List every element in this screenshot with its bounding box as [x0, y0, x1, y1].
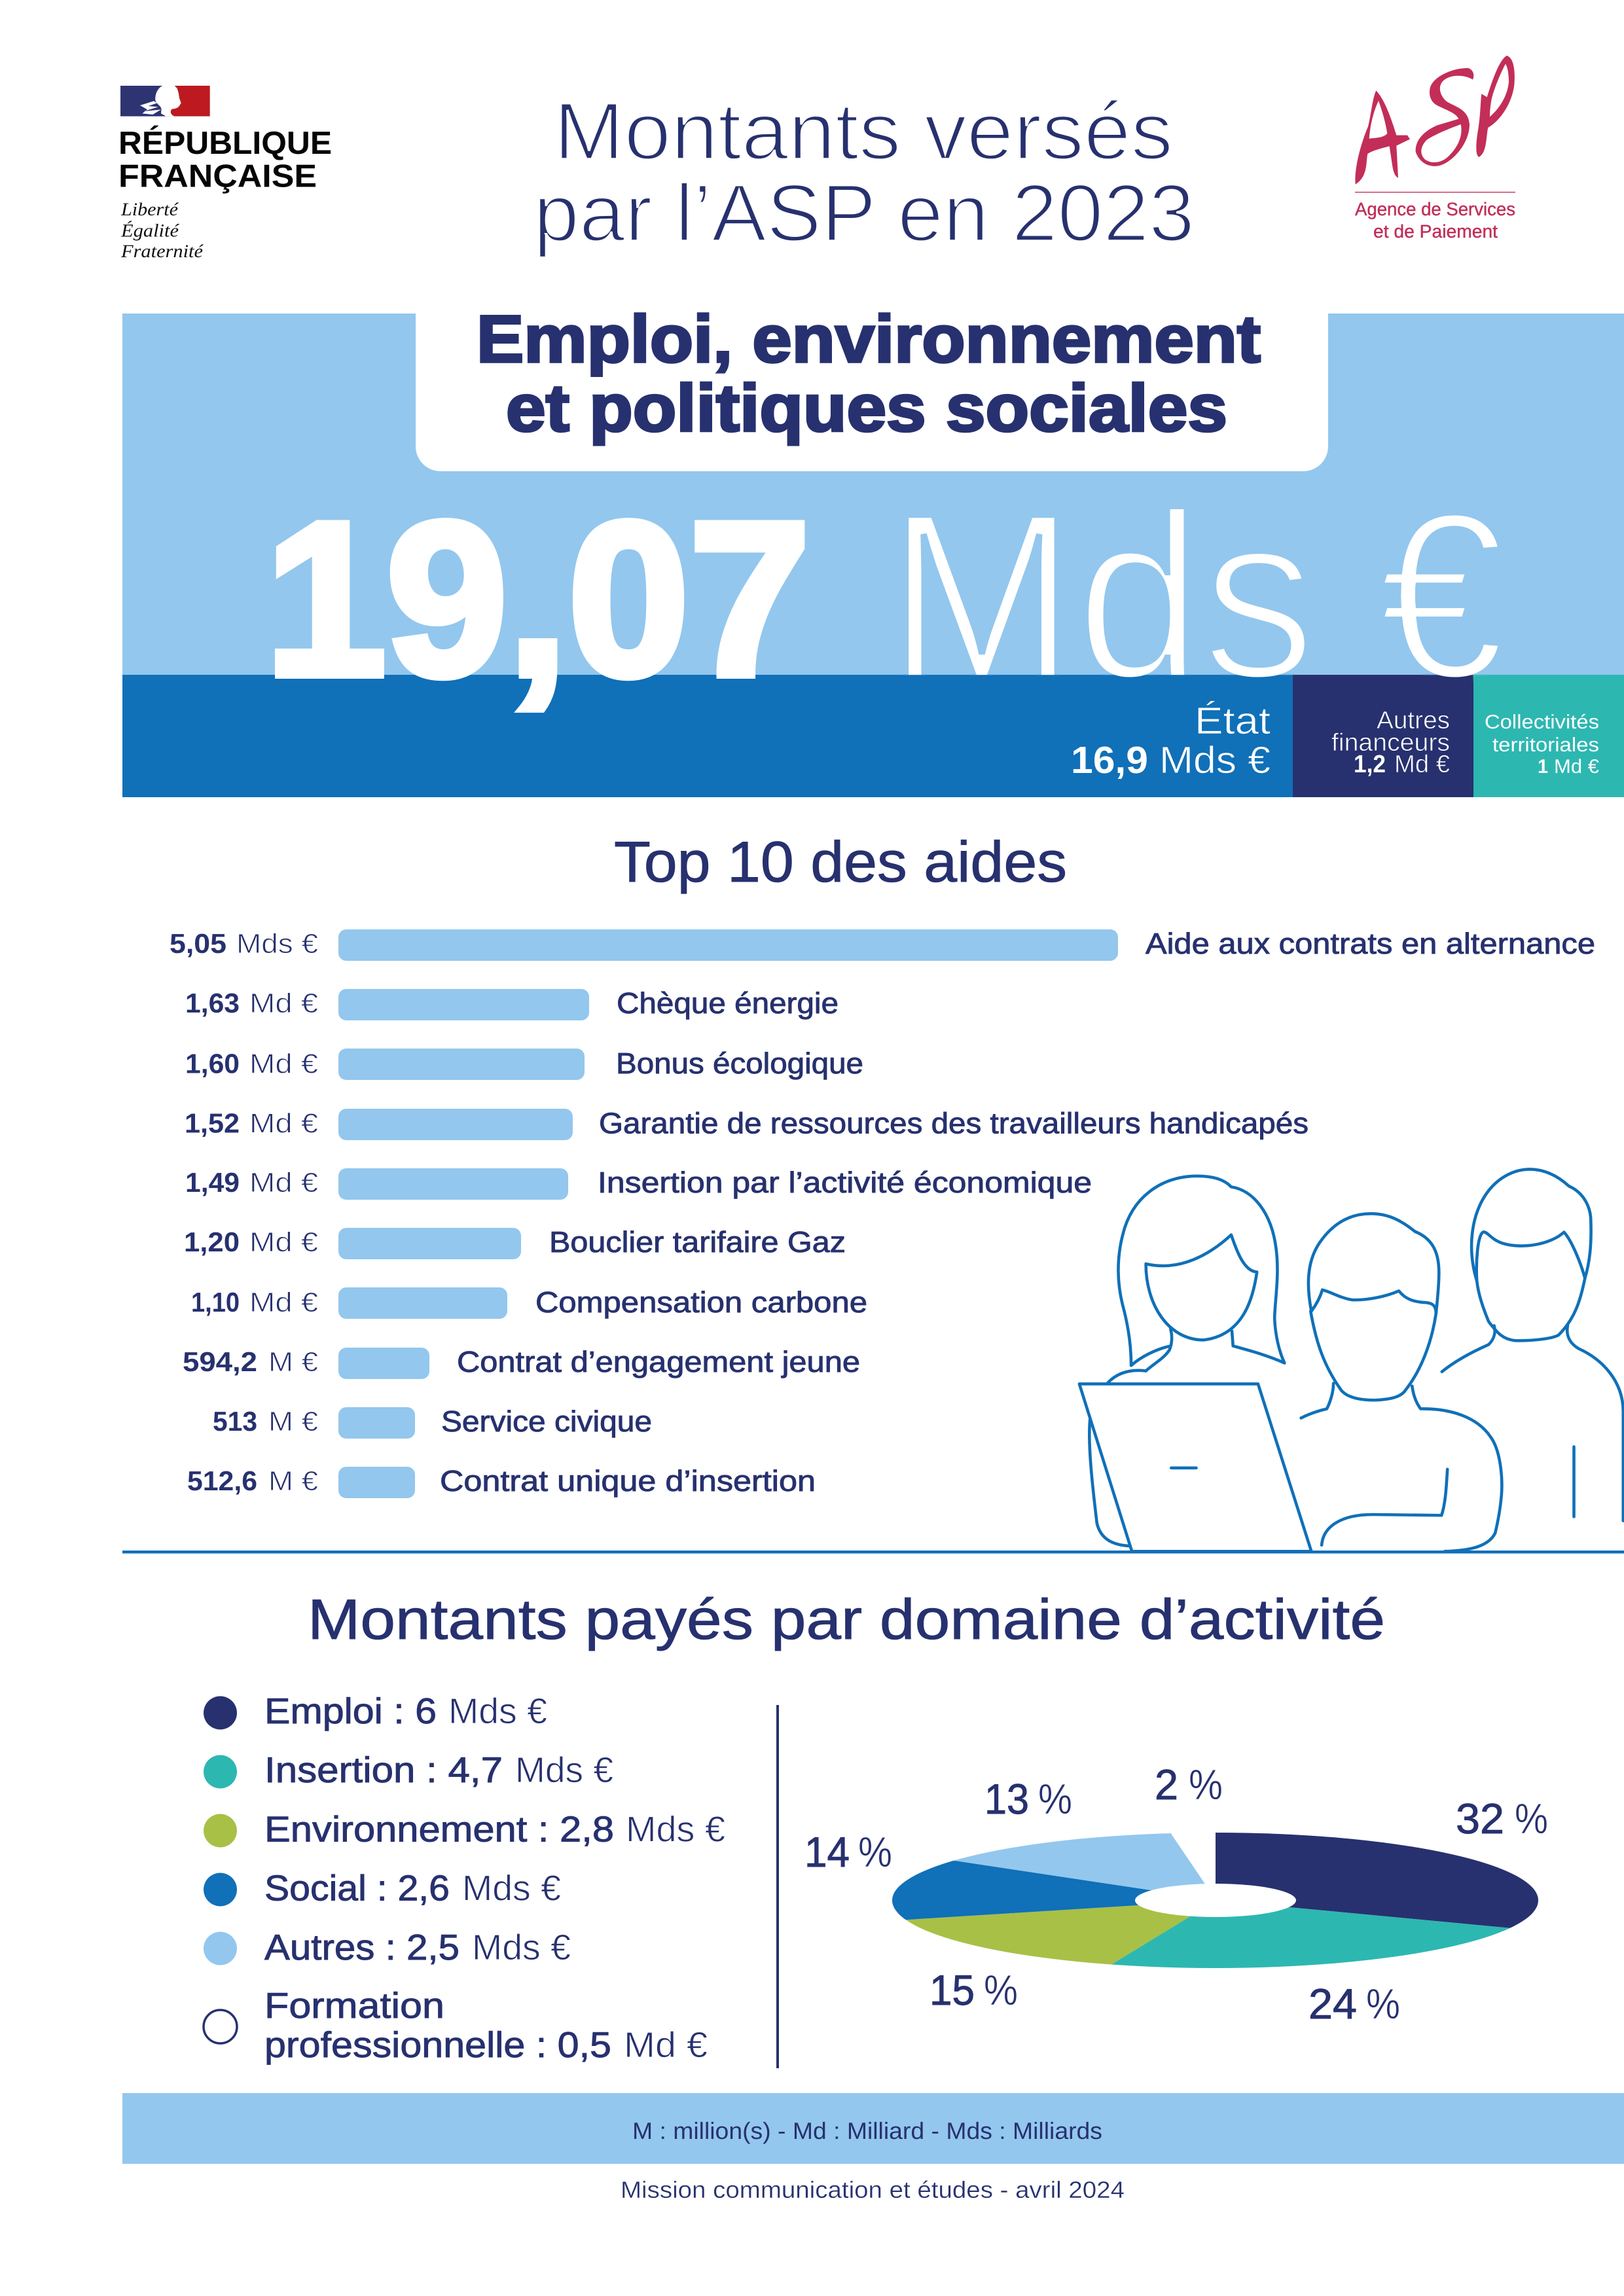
label: 24 % — [1308, 1980, 1400, 2028]
big number: 19,07 Mds €: 19,07 — [265, 476, 810, 721]
big number: 19,07 Mds € — [265, 463, 1505, 728]
panel background — [122, 314, 1624, 675]
label: 14 %: 14 — [804, 1828, 850, 1876]
row: Aide aux contrats en alternance: 5,05 — [170, 928, 226, 959]
label: 2 % — [1155, 1761, 1223, 1808]
row: Service civique: Service civique — [441, 1405, 652, 1438]
label: Collectivités territoriales 1 Md €: 1 — [1538, 756, 1548, 778]
row: Contrat unique d'insertion: M € — [268, 1465, 318, 1496]
heading tab — [416, 314, 1328, 471]
heading: Emploi, environnement et politiques sociales — [477, 302, 1261, 445]
label: Collectivités territoriales 1 Md €: Collectivités — [1485, 711, 1599, 733]
label: 14 % — [804, 1828, 892, 1876]
row: Insertion par l'activité économique: Md € — [249, 1167, 318, 1198]
credit line: Mission communication et études - avril 2024 — [621, 2176, 1125, 2203]
row: Contrat unique d'insertion: 512,6 — [187, 1465, 257, 1496]
legend item: Emploi — [204, 1691, 547, 1731]
man in the centre — [1301, 1213, 1502, 1551]
legend item: Formation professionnelle: Md € — [624, 2024, 708, 2065]
legend item: Social: Mds € — [462, 1868, 561, 1909]
slice: Emploi 32 % — [1216, 1833, 1538, 1928]
woman — [1089, 1176, 1284, 1546]
heading: Top 10 des aides: Top 10 des aides — [614, 829, 1067, 894]
laptop — [1079, 1384, 1311, 1551]
label: Collectivités territoriales 1 Md € — [1485, 711, 1599, 778]
logo caption — [1355, 199, 1515, 242]
label: Autres financeurs 1,2 Md €: Md € — [1394, 751, 1450, 778]
row: Contrat d'engagement jeune: 594,2 — [183, 1346, 257, 1377]
pie hole — [1135, 1884, 1296, 1917]
row: Aide aux contrats en alternance: Aide aux contrats en alternance — [1146, 927, 1595, 960]
label: 13 % — [984, 1775, 1072, 1823]
row: Bouclier tarifaire Gaz: 1,20 — [184, 1227, 240, 1257]
legend item: Environnement: Mds € — [626, 1809, 725, 1850]
legend item: Emploi: Mds € — [448, 1691, 547, 1731]
logo wordmark: FRANÇAISE — [118, 159, 317, 194]
slice: Autres 13 % — [877, 1820, 1216, 1901]
pie slices — [892, 1833, 1538, 1968]
pie chart: domaines d'activité — [807, 1769, 1547, 2018]
row: Compensation carbone: Md € — [249, 1287, 318, 1318]
row: Compensation carbone — [191, 1285, 867, 1319]
row: Service civique: M € — [268, 1406, 318, 1437]
label: 2 %: 2 — [1155, 1761, 1178, 1808]
label: 14 %: % — [858, 1828, 892, 1876]
row: Bouclier tarifaire Gaz: Md € — [249, 1227, 318, 1257]
row: Bonus écologique — [185, 1047, 863, 1080]
row: Garantie de ressources: Md € — [249, 1107, 318, 1139]
man on the right — [1442, 1169, 1623, 1521]
illustration: three people and a laptop — [1079, 1169, 1623, 1551]
row: Insertion par l'activité économique — [185, 1166, 1092, 1200]
row: Contrat d'engagement jeune — [183, 1345, 860, 1379]
legend item: Formation professionnelle: professionnelle : 0,5 — [264, 2024, 611, 2065]
legend item: Formation professionnelle: Formation — [264, 1985, 444, 2026]
row: Garantie de ressources: 1,52 — [185, 1107, 240, 1139]
label: Autres financeurs 1,2 Md €: Autres — [1377, 707, 1450, 734]
logo motto — [120, 200, 204, 262]
logo: ASP — [1355, 56, 1515, 242]
legend — [204, 1691, 725, 2065]
label: Autres financeurs 1,2 Md €: financeurs — [1331, 729, 1450, 757]
icon: ASP monogram — [1355, 56, 1515, 192]
row: Chèque énergie: 1,63 — [185, 988, 240, 1018]
legend item: Environnement — [204, 1809, 725, 1850]
slice: Environnement 15 % — [906, 1905, 1190, 1965]
label: 24 %: % — [1366, 1980, 1400, 2028]
label: 15 % — [929, 1966, 1018, 2014]
row: Contrat d'engagement jeune: Contrat d’engagement jeune — [457, 1345, 860, 1378]
legend item: Insertion — [204, 1749, 613, 1790]
row: Contrat d'engagement jeune: M € — [268, 1346, 318, 1377]
label: Autres financeurs 1,2 Md € — [1331, 707, 1450, 778]
legend item: Autres: Autres : 2,5 — [264, 1927, 460, 1967]
row: Service civique: 513 — [213, 1406, 257, 1437]
heading: Montants payés par domaine d'activité: Montants payés par domaine d’activité — [308, 1588, 1385, 1651]
row: Chèque énergie: Chèque énergie — [617, 986, 839, 1020]
logo motto: Liberté — [120, 200, 179, 220]
label: État 16,9 Mds € — [1071, 700, 1271, 781]
label: État 16,9 Mds €: Mds € — [1159, 739, 1271, 781]
row: Garantie de ressources — [185, 1106, 1308, 1140]
label: 32 %: % — [1515, 1795, 1548, 1842]
legend item: Insertion: Mds € — [515, 1749, 613, 1790]
logo motto: Fraternité — [120, 242, 204, 262]
row: Aide aux contrats en alternance: Mds € — [236, 928, 318, 959]
label: Collectivités territoriales 1 Md €: territoriales — [1492, 734, 1599, 756]
label: 15 %: % — [984, 1966, 1018, 2014]
legend item: Environnement: Environnement : 2,8 — [264, 1809, 614, 1850]
logo caption: et de Paiement — [1373, 221, 1498, 242]
logo wordmark: RÉPUBLIQUE — [118, 125, 332, 161]
panel: total amount — [122, 302, 1624, 797]
segment: État — [122, 675, 1293, 797]
legend item: Social — [204, 1868, 561, 1909]
label: 24 %: 24 — [1308, 1980, 1357, 2028]
logo motto: Égalité — [120, 221, 180, 242]
row: Bouclier tarifaire Gaz: Bouclier tarifaire Gaz — [549, 1225, 846, 1259]
title: Montants versés — [554, 86, 1173, 177]
row: Insertion par l'activité économique: 1,49 — [185, 1167, 240, 1198]
footer band: M : million(s) - Md : Milliard - Mds : Milliards — [632, 2117, 1102, 2144]
row: Garantie de ressources: Garantie de ressources des travailleurs handicapés — [599, 1106, 1308, 1140]
legend item: Autres — [204, 1927, 571, 1967]
logo: République française — [118, 86, 332, 262]
title — [533, 86, 1195, 259]
row: Contrat unique d'insertion — [187, 1464, 816, 1498]
big number: 19,07 Mds €: Mds € — [887, 463, 1505, 728]
icon: Marianne flag — [120, 86, 210, 117]
row: Bonus écologique: Md € — [249, 1049, 318, 1079]
legend item: Social: Social : 2,6 — [264, 1868, 450, 1909]
row: Chèque énergie: Md € — [249, 988, 318, 1018]
legend item: Insertion: Insertion : 4,7 — [264, 1749, 503, 1790]
segment: Collectivités territoriales — [1473, 675, 1624, 797]
label: 13 %: 13 — [984, 1775, 1029, 1823]
row: Contrat unique d'insertion: Contrat unique d’insertion — [440, 1464, 816, 1498]
label: 32 %: 32 — [1456, 1795, 1504, 1842]
label: 13 %: % — [1038, 1775, 1072, 1823]
slice: Social 14 % — [869, 1849, 1216, 1922]
heading: Emploi, environnement et politiques sociales: et politiques sociales — [506, 370, 1227, 445]
label: 2 %: % — [1189, 1761, 1223, 1808]
title: par l’ASP en 2023 — [533, 168, 1195, 259]
row: Bonus écologique: Bonus écologique — [616, 1047, 863, 1080]
row: Compensation carbone: Compensation carbone — [535, 1285, 867, 1319]
label: État 16,9 Mds €: État — [1195, 700, 1271, 742]
footer band — [122, 2093, 1624, 2164]
legend item: Emploi: Emploi : 6 — [264, 1691, 437, 1731]
row: Chèque énergie — [185, 986, 839, 1020]
row: Bouclier tarifaire Gaz — [184, 1225, 846, 1259]
logo caption: Agence de Services — [1355, 199, 1515, 219]
legend item: Formation professionnelle — [204, 1985, 708, 2065]
label: État 16,9 Mds €: 16,9 — [1071, 739, 1148, 781]
legend item: Autres: Mds € — [472, 1927, 571, 1967]
logo wordmark — [118, 125, 332, 194]
bar chart: Top 10 des aides — [170, 927, 1595, 1498]
heading: Emploi, environnement et politiques sociales: Emploi, environnement — [477, 302, 1261, 376]
label: 15 %: 15 — [929, 1966, 975, 2014]
row: Insertion par l'activité économique: Insertion par l’activité économique — [598, 1166, 1092, 1199]
row: Compensation carbone: 1,10 — [191, 1287, 240, 1318]
label: 32 % — [1456, 1795, 1548, 1842]
row: Service civique — [213, 1405, 652, 1439]
row: Bonus écologique: 1,60 — [185, 1049, 240, 1079]
slice: Insertion 24 % — [1111, 1907, 1511, 1968]
label: Autres financeurs 1,2 Md €: 1,2 — [1354, 751, 1386, 778]
label: Collectivités territoriales 1 Md €: Md € — [1554, 756, 1599, 778]
row: Aide aux contrats en alternance — [170, 927, 1595, 961]
segment: Autres financeurs — [1293, 675, 1473, 797]
